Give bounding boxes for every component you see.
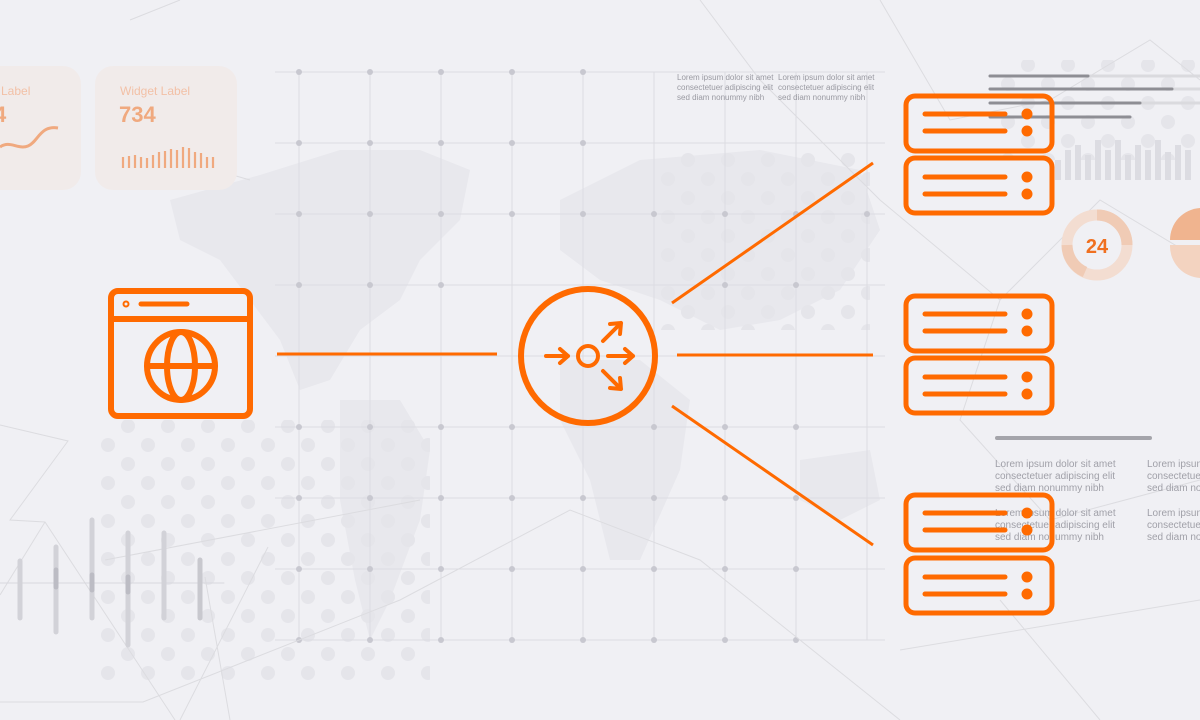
faint histogram [1055,140,1191,180]
server group middle [906,296,1052,413]
grid [275,72,885,640]
widget: left partial card: Label [1,84,30,98]
widget: left partial card [0,66,81,190]
icon: load balancer [521,289,655,423]
top-right grey bars [990,76,1200,117]
server group bottom [906,495,1052,613]
lower-right text block [995,438,1200,543]
top lorem text: consectetuer adipiscing elit [778,83,875,92]
widget: 734 card: Widget Label [120,84,190,98]
lower-right text block: sed diam no [1147,483,1200,494]
donut: 24: 24 [1086,236,1109,258]
top lorem text [677,73,875,102]
lower-right text block: consectetuer adipiscing elit [995,471,1115,482]
widget: 734 card [95,66,237,190]
top lorem text: Lorem ipsum dolor sit amet [778,73,875,82]
widget cards [0,66,237,190]
widget: 734 card: 734 [119,102,156,127]
top lorem text: sed diam nonummy nibh [778,93,865,102]
dot patterns [100,60,1200,680]
lower-right text block: Lorem ipsum dolor sit amet [995,508,1116,519]
lower-right text block: sed diam nonummy nibh [995,532,1104,543]
lower-right text block: Lorem ipsum dolor sit amet [995,459,1116,470]
top lorem text: sed diam nonummy nibh [677,93,764,102]
icon: browser with globe [111,291,250,416]
servers [906,96,1052,613]
server group top [906,96,1052,213]
lower-right text block: sed diam nonummy nibh [995,483,1104,494]
bottom-left bar chart [0,520,224,645]
map silhouettes [170,150,880,640]
top lorem text: consectetuer adipiscing elit [677,83,774,92]
donut: 24 [1067,215,1127,275]
lower-right text block: sed diam no [1147,532,1200,543]
top lorem text: Lorem ipsum dolor sit amet [677,73,774,82]
connectors [277,163,873,545]
lower-right text block: consectetuer adipiscing elit [995,520,1115,531]
pie partial [1170,208,1200,278]
